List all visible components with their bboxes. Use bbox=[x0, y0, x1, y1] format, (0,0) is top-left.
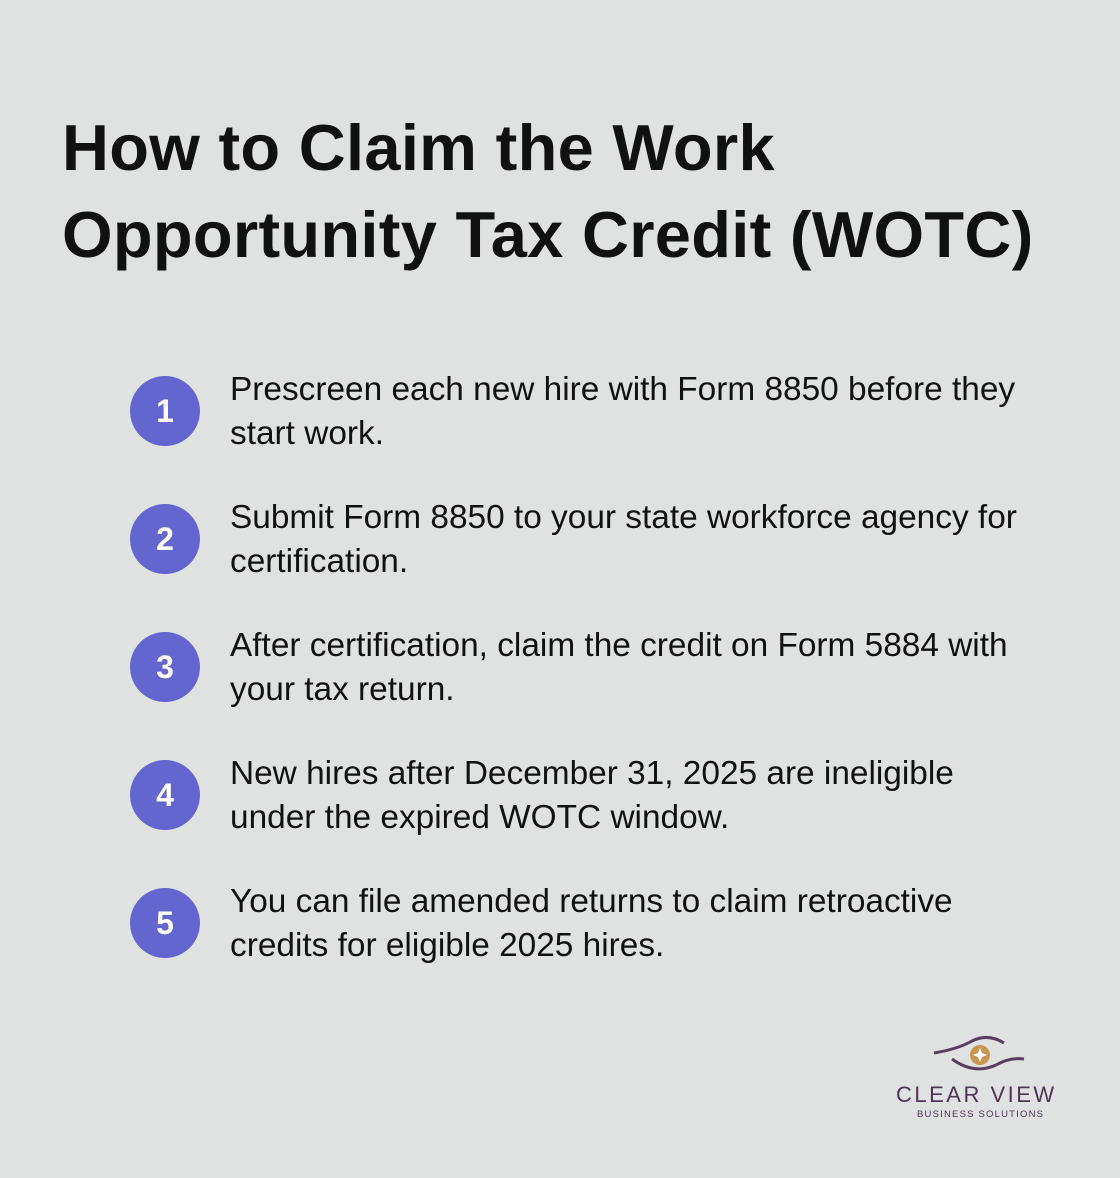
step 4 text: under the expired WOTC window. bbox=[230, 799, 729, 836]
step 1 text: start work. bbox=[230, 415, 384, 452]
number badge 1: 1 bbox=[156, 393, 174, 429]
title: Opportunity Tax Credit (WOTC) bbox=[62, 198, 1034, 271]
number badge 4: 4 bbox=[156, 777, 174, 813]
title bbox=[62, 111, 1034, 271]
number badge 3: 3 bbox=[156, 649, 174, 685]
step 3 text bbox=[230, 627, 1008, 708]
number badge 5 bbox=[130, 888, 200, 958]
logo bbox=[896, 1036, 1057, 1120]
step 5 text bbox=[230, 883, 953, 964]
step 5 text: credits for eligible 2025 hires. bbox=[230, 927, 664, 964]
icon: eye bbox=[934, 1036, 1024, 1070]
number badge 2 bbox=[130, 504, 200, 574]
step 1 bbox=[130, 371, 1015, 452]
step 3 text: After certification, claim the credit on Form 5884 with bbox=[230, 627, 1008, 664]
number badge 4 bbox=[130, 760, 200, 830]
step 2 text bbox=[230, 499, 1017, 580]
tagline: BUSINESS SOLUTIONS bbox=[917, 1109, 1044, 1120]
brand name: CLEAR VIEW bbox=[896, 1082, 1057, 1107]
step 5 bbox=[130, 883, 953, 964]
number badge 3 bbox=[130, 632, 200, 702]
step 1 text bbox=[230, 371, 1015, 452]
number badge 2: 2 bbox=[156, 521, 174, 557]
step 2 bbox=[130, 499, 1017, 580]
number badge 1 bbox=[130, 376, 200, 446]
title: How to Claim the Work bbox=[62, 111, 775, 184]
step 4 text bbox=[230, 755, 954, 836]
step 2 text: certification. bbox=[230, 543, 408, 580]
step 4 bbox=[130, 755, 954, 836]
step 4 text: New hires after December 31, 2025 are ineligible bbox=[230, 755, 954, 792]
number badge 5: 5 bbox=[156, 905, 174, 941]
step 3 text: your tax return. bbox=[230, 671, 455, 708]
step 3 bbox=[130, 627, 1008, 708]
step 5 text: You can file amended returns to claim retroactive bbox=[230, 883, 953, 920]
step 1 text: Prescreen each new hire with Form 8850 before they bbox=[230, 371, 1015, 408]
step 2 text: Submit Form 8850 to your state workforce agency for bbox=[230, 499, 1017, 536]
